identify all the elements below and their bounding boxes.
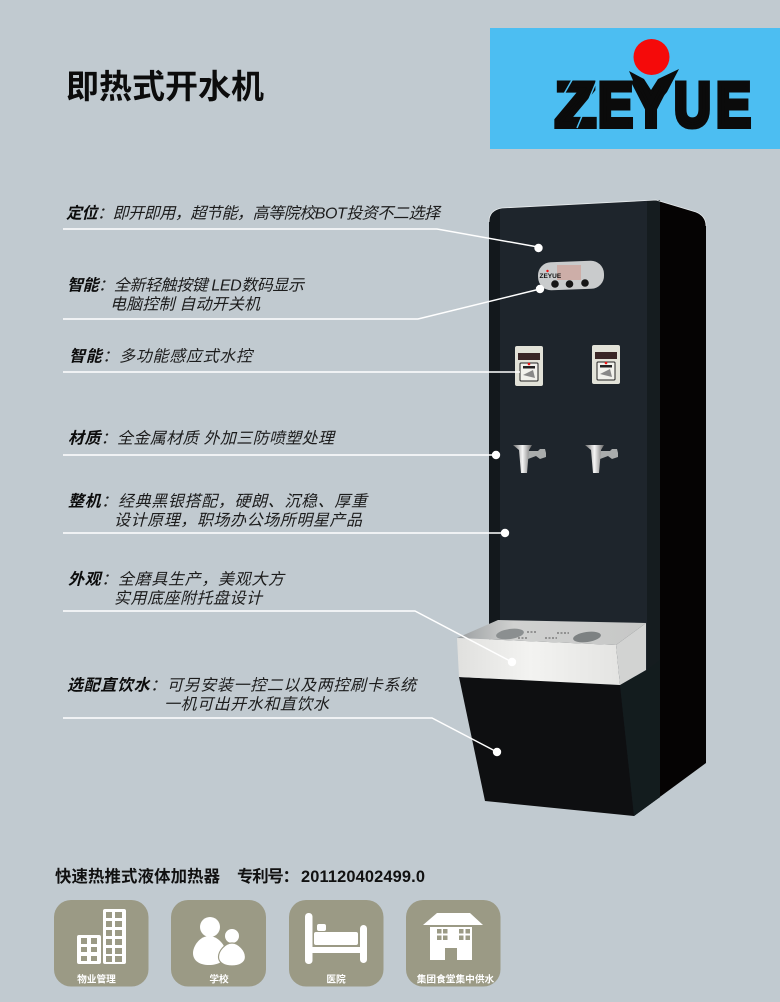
- icon tile: hospital: [289, 900, 384, 986]
- logo: wordmark: Z: [555, 70, 596, 140]
- left sensor control: [515, 346, 543, 386]
- right edge shading: [647, 200, 660, 806]
- left edge shading: [489, 209, 500, 640]
- callout 6: appearance: [63, 570, 516, 666]
- callout 4: material: 材质：全金属材质 外加三防喷塑处理: [68, 430, 336, 448]
- icon: buildings: [77, 909, 126, 964]
- callout 1: positioning: [63, 204, 543, 252]
- callout 7: optional drinking water: 一机可出开水和直饮水: [164, 696, 330, 714]
- control display panel: ZEYUE: [540, 273, 562, 280]
- water heater machine: [457, 200, 706, 816]
- icon tile: school: [171, 900, 266, 986]
- callout 2: smart controls: 电脑控制 自动开关机: [110, 296, 261, 314]
- title: 即热式开水机: [66, 68, 264, 105]
- drip tray right side: [616, 623, 646, 685]
- callout 6: appearance: 外观：全磨具生产，美观大方: [68, 570, 286, 588]
- base side panel: [620, 660, 660, 816]
- callout 2: smart controls: 智能：全新轻触按键 LED数码显示: [67, 276, 306, 294]
- icon tile: hospital: 医院: [326, 972, 346, 986]
- machine side panel: [600, 200, 706, 816]
- icon tile: school: 学校: [209, 972, 229, 986]
- icon tile: canteen: 集团食堂集中供水: [417, 972, 495, 986]
- callout 7: optional drinking water: 选配直饮水：可另安装一控二以及两控刷卡系统: [67, 676, 418, 694]
- left faucet: [513, 445, 546, 473]
- callout 7: optional drinking water: [63, 676, 501, 756]
- logo: wordmark: [555, 70, 751, 140]
- logo: wordmark: Y: [633, 70, 669, 140]
- logo: arms of the Y: [629, 69, 679, 110]
- callout 5: whole machine: [63, 492, 509, 537]
- machine front body: [489, 200, 660, 816]
- right faucet: [585, 445, 618, 473]
- logo: wordmark: E: [598, 70, 633, 140]
- logo: red circle: [634, 39, 670, 75]
- patent line: 快速热推式液体加热器: [55, 868, 221, 886]
- callout 4: material: [63, 430, 500, 459]
- icon tile: property management: 物业管理: [77, 972, 116, 986]
- control display panel: [538, 260, 604, 291]
- icon tile: property management: [54, 900, 148, 986]
- patent line: 专利号：: [237, 868, 299, 886]
- callout 5: whole machine: 整机：经典黑银搭配，硬朗、沉稳、厚重: [68, 492, 369, 510]
- base front panel: [459, 677, 634, 816]
- patent line: 201120402499.0: [301, 868, 425, 886]
- callout 3: sensor water control: 智能：多功能感应式水控: [69, 348, 255, 366]
- logo panel: [490, 28, 780, 149]
- logo: wordmark: E: [716, 70, 751, 140]
- patent line: [55, 868, 425, 886]
- callout 5: whole machine: 设计原理，职场办公场所明星产品: [114, 512, 363, 530]
- callout 1: positioning: 定位：即开即用，超节能，高等院校BOT投资不二选择: [66, 204, 442, 222]
- icon tile: canteen: [406, 900, 500, 986]
- drip tray front: [457, 638, 620, 685]
- logo: wordmark: U: [674, 70, 711, 140]
- right sensor control: [592, 345, 620, 384]
- icon: bed: [305, 913, 367, 964]
- callout 2: smart controls: [63, 276, 544, 319]
- drip tray top: [457, 620, 646, 645]
- icon: people: [193, 917, 246, 966]
- icon: house: [423, 913, 483, 960]
- top highlight: [489, 200, 706, 226]
- callout 6: appearance: 实用底座附托盘设计: [114, 590, 264, 608]
